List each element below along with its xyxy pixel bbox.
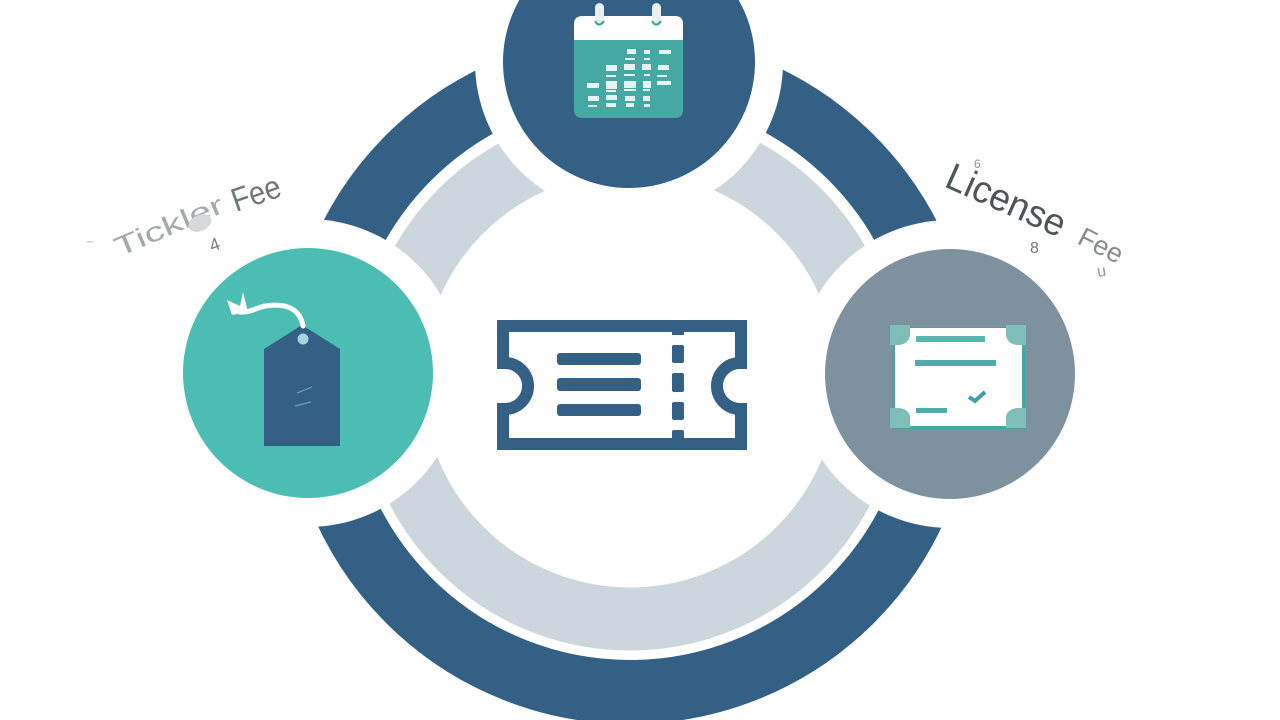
icon: calendar [574, 3, 683, 118]
icon: price tag [227, 292, 340, 446]
icon: licence certificate [890, 325, 1026, 429]
label: licence fee: u [1096, 263, 1107, 281]
label: licence fee: 8 [1030, 240, 1039, 257]
label: licence fee [939, 156, 1128, 281]
white halo: top [475, 0, 783, 216]
outer dark ring [317, 66, 943, 692]
label: licence fee: Fee [1073, 222, 1128, 269]
label: ticket fee: 4 [207, 234, 223, 256]
right grey circle [825, 249, 1075, 499]
inner light grey ring [391, 141, 869, 619]
label: ticket fee: Tickler [110, 190, 228, 263]
label: licence fee: 6 [974, 157, 981, 171]
icon: central ticket [503, 326, 741, 444]
label: ticket fee [87, 167, 286, 263]
white halo: right [796, 220, 1104, 528]
top circle [503, 0, 755, 188]
label: ticket fee: Fee [226, 167, 286, 219]
left teal circle [183, 248, 433, 498]
label: licence fee: License [939, 156, 1072, 246]
white halo: left [154, 219, 462, 527]
